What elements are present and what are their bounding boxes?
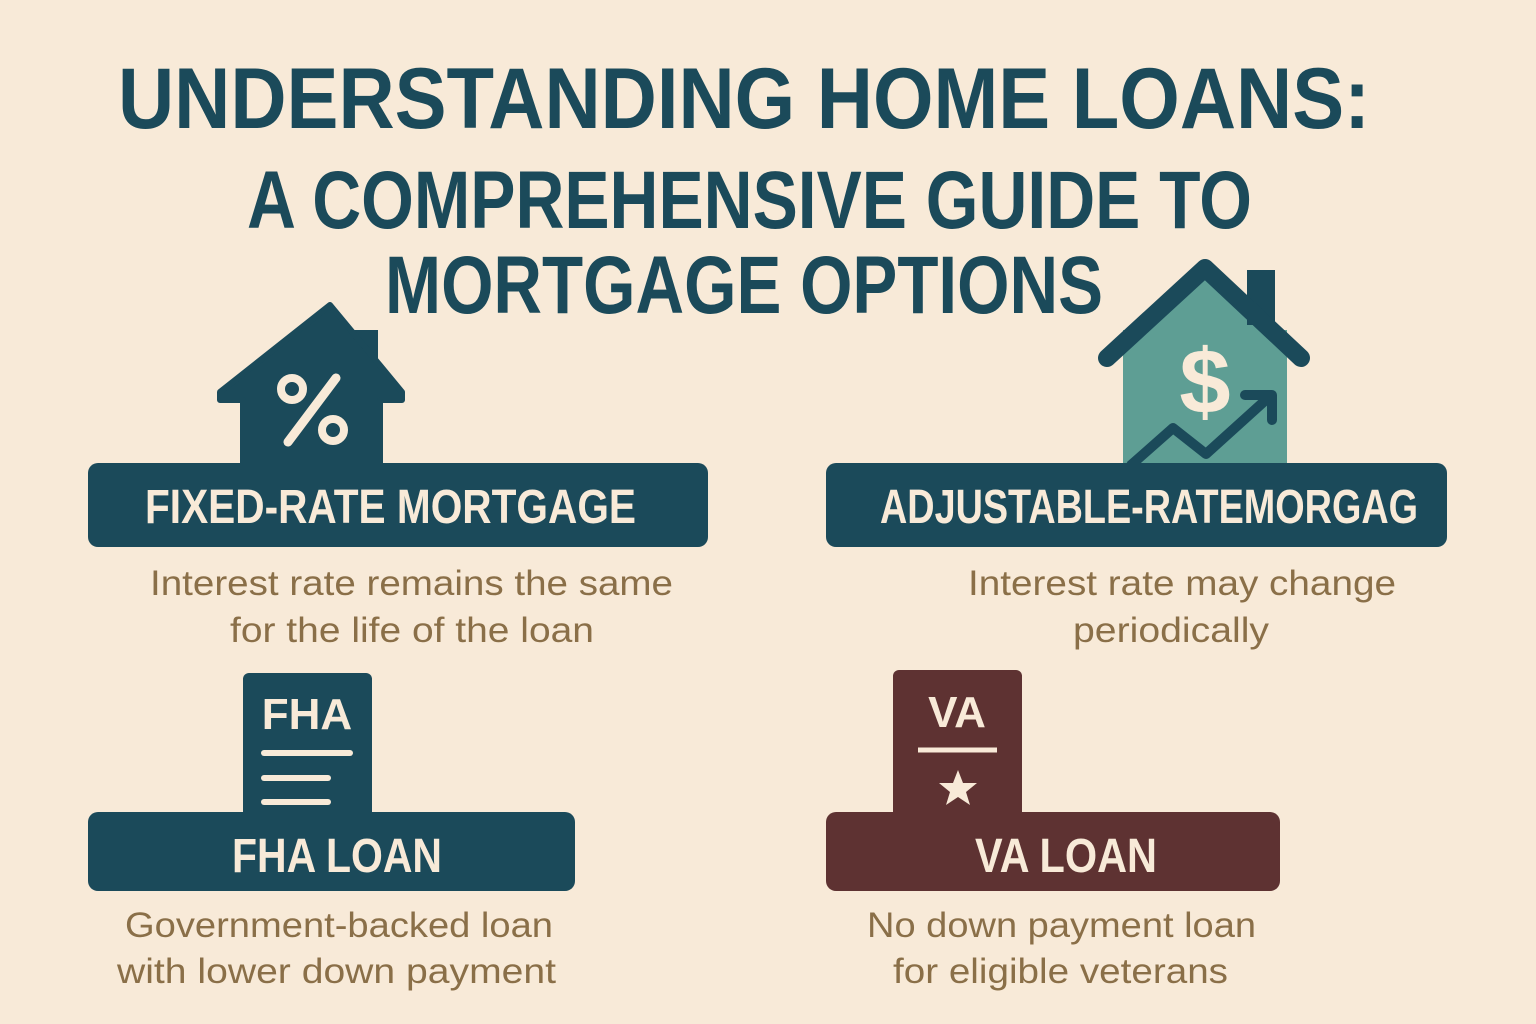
title xyxy=(118,51,1370,331)
title: UNDERSTANDING HOME LOANS: xyxy=(118,51,1370,147)
description: Interest rate may change xyxy=(968,564,1396,603)
title: MORTGAGE OPTIONS xyxy=(385,240,1103,331)
icon: VA document with star xyxy=(893,670,1022,822)
panel: VA loan xyxy=(826,670,1280,991)
label bar: VA LOAN xyxy=(975,830,1157,883)
icon: house with dollar and arrow xyxy=(1107,268,1301,470)
icon: FHA document xyxy=(243,673,372,823)
description xyxy=(968,564,1396,650)
description: Interest rate remains the same xyxy=(150,564,673,603)
description: Government-backed loan xyxy=(125,906,553,945)
title: A COMPREHENSIVE GUIDE TO xyxy=(247,155,1252,246)
label bar: FIXED-RATE MORTGAGE xyxy=(145,481,636,534)
description: for the life of the loan xyxy=(230,611,594,650)
panel: fixed-rate mortgage xyxy=(88,305,708,650)
description: periodically xyxy=(1073,611,1270,650)
description: for eligible veterans xyxy=(893,952,1228,991)
description: with lower down payment xyxy=(116,952,556,991)
label bar xyxy=(826,812,1280,891)
description: No down payment loan xyxy=(867,906,1256,945)
label bar xyxy=(88,812,575,891)
label bar xyxy=(826,463,1447,547)
description xyxy=(116,906,556,991)
icon: FHA document: FHA xyxy=(262,690,352,739)
panel: adjustable-rate mortgage xyxy=(826,268,1447,650)
label bar: FHA LOAN xyxy=(232,830,442,883)
description xyxy=(867,906,1256,991)
panel: FHA loan xyxy=(88,673,575,991)
description xyxy=(150,564,673,650)
label bar xyxy=(88,463,708,547)
icon: VA document with star: VA xyxy=(928,688,986,737)
icon: house with percent xyxy=(220,305,402,470)
icon: house with dollar and arrow: $ xyxy=(1179,331,1231,433)
